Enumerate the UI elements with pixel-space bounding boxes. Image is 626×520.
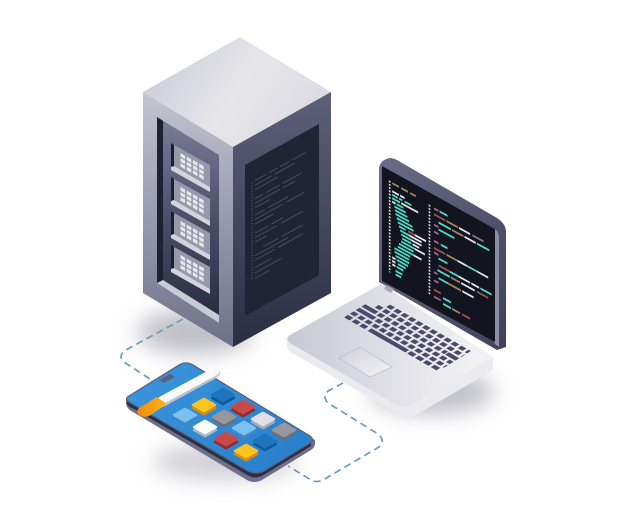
laptop lid inner rim bbox=[381, 166, 499, 347]
server recessed rack bbox=[157, 117, 219, 323]
laptop bbox=[287, 158, 506, 417]
server tower bbox=[143, 37, 331, 347]
app icon: yellow bbox=[193, 399, 215, 414]
dashed connector: server to phone bbox=[121, 319, 183, 379]
laptop code lines bbox=[390, 181, 492, 331]
rack unit 4 bbox=[171, 245, 210, 294]
line numbers bbox=[389, 181, 391, 272]
server left face bbox=[143, 92, 233, 347]
server faint code lines bbox=[252, 153, 306, 280]
ground shadow: laptop bbox=[370, 370, 494, 414]
laptop base top bbox=[288, 284, 493, 408]
app icon: grey bbox=[213, 411, 235, 426]
phone notch bbox=[159, 374, 175, 383]
ground shadow: server bbox=[137, 310, 253, 354]
app icon: grey 2 bbox=[273, 424, 295, 439]
phone search bar bbox=[137, 372, 215, 417]
rack unit 2 bbox=[171, 177, 210, 226]
app icon: red 2 bbox=[215, 433, 237, 448]
app icon: white bbox=[194, 421, 216, 436]
phone body edge bbox=[126, 363, 315, 482]
laptop touchpad bbox=[339, 347, 392, 377]
app icon: yellow 2 bbox=[235, 445, 257, 460]
dashed connector: laptop to phone bbox=[288, 383, 382, 482]
rack unit 3 bbox=[171, 211, 210, 260]
app icon: dark blue 2 bbox=[254, 435, 276, 450]
server dark code panel bbox=[245, 124, 319, 316]
server right face bbox=[233, 92, 331, 347]
left code column bbox=[392, 183, 426, 291]
app icon: light blue 2 bbox=[233, 422, 255, 437]
laptop keyboard bbox=[346, 298, 469, 370]
laptop base side bbox=[287, 337, 493, 417]
right code column bbox=[434, 208, 492, 331]
app icon: light grey bbox=[252, 413, 274, 428]
app icon: red bbox=[232, 401, 254, 416]
rack unit 1 bbox=[171, 143, 210, 192]
server top face bbox=[143, 37, 331, 147]
phone dark lower rim bbox=[127, 400, 311, 478]
app icon: dark blue bbox=[212, 389, 234, 404]
phone screen bbox=[126, 363, 312, 473]
laptop hinge bbox=[384, 285, 394, 293]
app icon: light blue bbox=[174, 409, 196, 424]
smartphone bbox=[126, 363, 315, 482]
ground shadow: phone bbox=[153, 444, 297, 480]
laptop lid bbox=[379, 158, 506, 350]
laptop screen bbox=[382, 166, 495, 342]
